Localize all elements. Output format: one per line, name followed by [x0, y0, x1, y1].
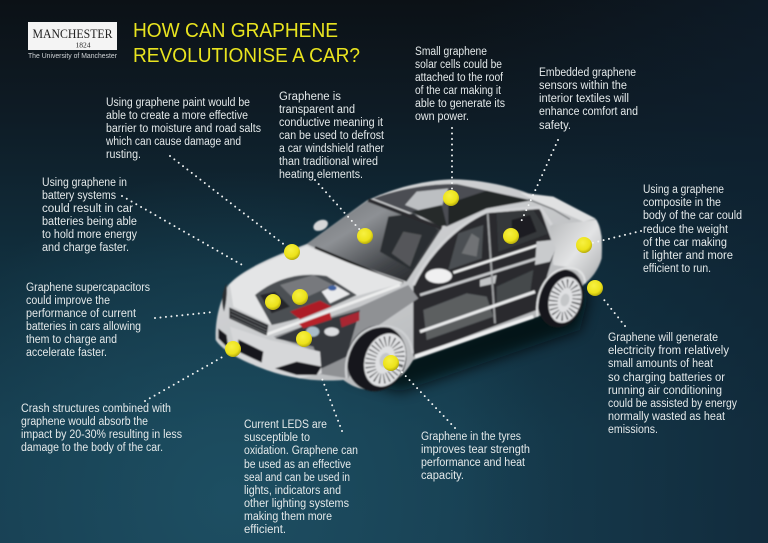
text: windshield: than traditional wired [279, 156, 378, 168]
text: windshield: conductive meaning it [279, 117, 384, 129]
text: crash structures: graphene would absorb the [21, 416, 148, 428]
text: composite: of the car making [643, 237, 727, 249]
text: composite: it lighter and more [643, 250, 733, 262]
yellow graphene markers [225, 190, 603, 371]
text: crash structures: impact by 20-30% resulting in less [21, 429, 182, 441]
text: graphene paint: Using graphene paint would be [106, 97, 250, 109]
text: LEDs: Current LEDS are [244, 419, 327, 431]
lower intake [238, 339, 263, 363]
lower door interior [423, 293, 493, 340]
text: solar cells: able to generate its [415, 98, 505, 110]
text: composite: reduce the weight [643, 224, 729, 236]
front wheel arch trim [346, 326, 413, 378]
logo: University of Manchester: 1824 [76, 40, 91, 50]
text: heat: so charging batteries or [608, 372, 725, 384]
text: sensors: interior textiles will [539, 93, 629, 105]
coolant bottle [322, 285, 350, 303]
rear wheel [531, 264, 590, 333]
text: battery systems: to hold more energy [42, 229, 137, 241]
text: solar cells: Small graphene [415, 46, 487, 58]
rear seat window [497, 210, 548, 252]
text: heat: normally wasted as heat [608, 411, 726, 423]
hood [230, 246, 404, 325]
text: windshield: a car windshield rather [279, 143, 384, 155]
text: supercapacitors: batteries in cars allowing [26, 321, 141, 333]
text: solar cells: attached to the roof [415, 72, 504, 84]
car shadow [345, 290, 590, 392]
windshield [307, 200, 442, 282]
text: windshield: Graphene is [279, 91, 341, 103]
text: battery systems: batteries being able [42, 216, 137, 228]
text: windshield: transparent and [279, 104, 355, 116]
title [133, 20, 360, 67]
front wheel [338, 317, 416, 400]
text: supercapacitors: accelerate faster. [26, 347, 107, 359]
text: heat: Graphene will generate [608, 332, 718, 344]
text: LEDs: other lighting systems [244, 498, 349, 510]
text: tyres: capacity. [421, 470, 464, 482]
rear body panel [550, 220, 602, 285]
rear wheel arch trim [537, 268, 585, 317]
far mirror [312, 218, 330, 233]
text: crash structures: damage to the body of the car. [21, 442, 163, 454]
text: solar cells [415, 46, 505, 123]
text: heat: electricity from relatively [608, 345, 729, 357]
text: LEDs: susceptible to [244, 432, 310, 444]
dotted leader lines [122, 128, 641, 431]
illustration: cutaway car [216, 179, 602, 400]
text: battery systems [42, 177, 137, 254]
text: sensors: sensors within the [539, 80, 627, 92]
headlight [222, 283, 227, 312]
text: LEDs: making them more [244, 511, 332, 523]
front bumper [230, 327, 322, 378]
text: heat: emissions. [608, 424, 658, 436]
text: graphene paint: rusting. [106, 149, 141, 161]
text: supercapacitors: them to charge and [26, 334, 117, 346]
front seats through windshield [380, 213, 438, 270]
front chassis cutaway [273, 285, 418, 378]
title: HOW CAN GRAPHENE [133, 20, 338, 42]
side interior [413, 208, 555, 357]
fog lamp vent [275, 362, 322, 375]
text: solar cells: of the car making it [415, 85, 502, 97]
text: supercapacitors: performance of current [26, 308, 137, 320]
text: composite: body of the car could [643, 210, 742, 222]
text: sensors: Embedded graphene [539, 67, 636, 79]
text: heat [608, 332, 737, 436]
text: LEDs: oxidation. Graphene can [244, 445, 358, 457]
text: battery systems: could result in car [42, 203, 133, 215]
engine bay [255, 275, 357, 325]
grille [229, 307, 268, 336]
text: solar cells: own power. [415, 111, 469, 123]
text: sensors [539, 67, 638, 132]
text: LEDs: be used as an effective [244, 459, 351, 471]
red engine parts [290, 301, 332, 319]
text: heat: running air conditioning [608, 385, 722, 397]
text: heat: could be assisted by energy [608, 398, 737, 410]
text: windshield [279, 91, 385, 181]
text: graphene paint: which can cause damage and [105, 136, 241, 148]
text: windshield: can be used to defrost [279, 130, 385, 142]
text: windshield: heating elements. [279, 169, 363, 181]
logo: University of Manchester [28, 22, 118, 60]
text: heat: small amounts of heat [608, 358, 714, 370]
text: crash structures [21, 403, 182, 454]
text: LEDs [244, 419, 358, 536]
text: solar cells: solar cells could be [415, 59, 502, 71]
rear door handle panel [535, 240, 556, 265]
text: composite: efficient to run. [643, 263, 711, 275]
text: tyres: Graphene in the tyres [421, 431, 521, 443]
door mirror [425, 269, 452, 283]
hood edge highlight [265, 285, 400, 335]
text: tyres: performance and heat [421, 457, 526, 469]
windshield header bar [368, 200, 442, 228]
title: REVOLUTIONISE A CAR? [133, 45, 360, 67]
text: battery systems: Using graphene in [42, 177, 127, 189]
text: composite: Using a graphene [643, 184, 724, 196]
text: supercapacitors [26, 282, 150, 359]
trunk lid [520, 193, 595, 222]
door bars [453, 243, 543, 273]
text: battery systems: and charge faster. [42, 242, 129, 254]
wiper recess [315, 247, 403, 283]
text: composite [643, 184, 742, 275]
logo: University of Manchester: The University of Manchester [28, 53, 118, 60]
text: composite: composite in the [643, 197, 721, 209]
text: LEDs: lights, indicators and [244, 485, 341, 497]
roof rail and pillars [413, 207, 552, 285]
text: graphene paint [105, 97, 261, 161]
text: tyres [421, 431, 530, 482]
text: tyres: improves tear strength [421, 444, 530, 456]
text: graphene paint: barrier to moisture and road salts [106, 123, 261, 135]
logo: University of Manchester: MANCHESTER [32, 26, 113, 41]
text: battery systems: battery systems [42, 190, 116, 202]
front seat side [448, 225, 483, 270]
text: sensors: enhance comfort and [539, 106, 638, 118]
text: graphene paint: able to create a more effective [106, 110, 248, 122]
text: sensors: safety. [539, 120, 571, 132]
text: LEDs: efficient. [244, 524, 286, 536]
text: supercapacitors: Graphene supercapacitors [26, 282, 150, 294]
text: crash structures: Crash structures combined with [21, 403, 171, 415]
text: LEDs: seal and can be used in [244, 472, 350, 484]
text: supercapacitors: could improve the [26, 295, 110, 307]
roof glass [373, 184, 530, 227]
car body [216, 179, 602, 390]
